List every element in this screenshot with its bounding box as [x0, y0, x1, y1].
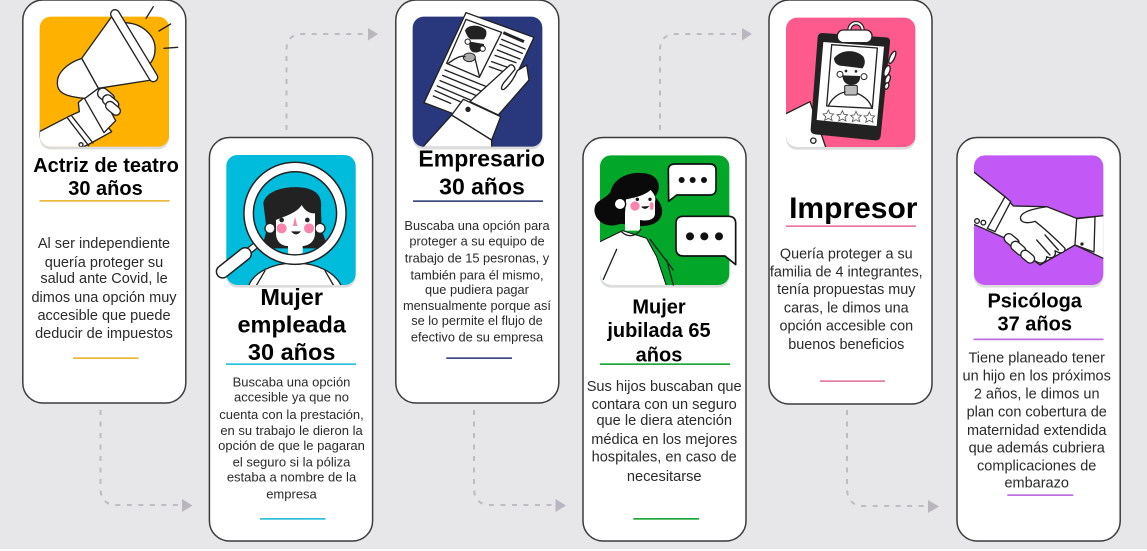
text: impresor description: caras, le dimos una — [784, 301, 909, 317]
heading: impresor: Impresor — [789, 192, 918, 225]
text: empresario description — [403, 218, 551, 345]
text: psicologa description: complicaciones de — [977, 459, 1096, 475]
text: actriz description: accesible que puede — [37, 308, 171, 324]
text: empresario description: proteger a su equipo de — [409, 234, 545, 249]
text: empresario description: se lo permite el flujo de — [411, 313, 543, 328]
text: psicologa description: maternidad extendida — [967, 423, 1107, 439]
panel: mujer empleada — [209, 138, 373, 541]
text: mujer empleada description: cuenta con la prestación, — [219, 407, 364, 422]
text: empresario description: efectivo de su empresa — [411, 330, 544, 345]
icon: clipboard with profile — [783, 18, 915, 150]
arrow: impresor to psicologa — [847, 410, 939, 513]
heading: actriz de teatro: Actriz de teatro — [33, 155, 179, 177]
heading: actriz de teatro: 30 años — [68, 178, 143, 200]
arrow: empresario to mujer jubilada — [474, 410, 566, 512]
heading: empresario: 30 años — [439, 173, 525, 199]
text: impresor description: Quería proteger a su — [780, 246, 913, 262]
heading: mujer empleada: empleada — [237, 312, 347, 338]
heading: empresario — [418, 146, 545, 199]
heading: mujer empleada: Mujer — [260, 284, 323, 310]
icon: magnifier over woman — [223, 155, 356, 288]
text: psicologa description — [963, 351, 1111, 492]
heading: mujer jubilada: años — [636, 345, 682, 367]
text: impresor description: opción accesible con — [779, 319, 913, 335]
text: mujer jubilada description: que le diera atención — [596, 413, 732, 429]
text: mujer jubilada description: Sus hijos buscaban que — [587, 379, 742, 395]
heading: actriz de teatro — [33, 155, 179, 200]
text: mujer empleada description: opción de que le pagaran — [218, 438, 365, 453]
text: mujer jubilada description — [587, 379, 742, 485]
text: mujer empleada description: accesible ya que no — [234, 390, 349, 405]
heading: mujer jubilada — [606, 296, 711, 367]
heading: mujer jubilada: jubilada 65 — [606, 320, 711, 342]
panel: psicologa — [957, 138, 1120, 541]
arrow: mujer empleada to empresario — [286, 28, 378, 130]
text: actriz description: salud ante Covid, le — [40, 271, 168, 287]
text: impresor description: tenía propuestas muy — [777, 282, 916, 298]
text: mujer jubilada description: hospitales, en caso de — [592, 450, 737, 466]
heading: psicologa — [987, 290, 1083, 336]
text: actriz description: dimos una opción muy — [31, 290, 177, 306]
text: mujer jubilada description: contara con un seguro — [592, 397, 737, 413]
text: mujer empleada description: empresa — [266, 486, 318, 501]
text: empresario description: Buscaba una opción para — [404, 218, 550, 233]
icon: woman with speech bubbles — [594, 155, 736, 288]
heading: mujer jubilada: Mujer — [632, 296, 686, 318]
text: impresor description: buenos beneficios — [788, 337, 904, 353]
text: empresario description: que pudiera pagar — [425, 282, 530, 297]
text: empresario description: mensualmente porque así — [403, 298, 551, 313]
panel: actriz de teatro — [23, 0, 186, 403]
heading: psicologa: Psicóloga — [987, 290, 1083, 312]
heading: mujer empleada: 30 años — [248, 339, 335, 365]
text: mujer jubilada description: médica en los mejores — [591, 432, 737, 448]
text: mujer empleada description: en su trabajo le dieron la — [220, 423, 363, 438]
text: actriz description — [31, 236, 177, 342]
heading: empresario: Empresario — [418, 146, 545, 172]
text: impresor description: familia de 4 integrantes, — [770, 265, 923, 281]
icon: megaphone — [39, 7, 178, 149]
text: empresario description: también para él mismo, — [410, 267, 544, 282]
text: actriz description: Al ser independiente — [38, 236, 170, 252]
heading: mujer empleada — [237, 284, 347, 365]
icon: handshake — [970, 155, 1107, 288]
panel: mujer jubilada — [583, 138, 746, 541]
text: psicologa description: que además cubriera — [969, 441, 1106, 457]
text: psicologa description: un hijo en los próximos — [963, 369, 1111, 385]
arrow: actriz to mujer empleada — [100, 410, 192, 512]
text: psicologa description: 2 años, le dimos un — [974, 386, 1100, 402]
text: mujer empleada description: estaba a nombre de la — [227, 470, 357, 485]
text: mujer empleada description: el seguro si la póliza — [233, 455, 351, 470]
text: psicologa description: plan con cobertura de — [967, 405, 1107, 421]
panel: empresario — [396, 0, 559, 403]
text: actriz description: quería proteger su — [45, 255, 163, 271]
text: mujer empleada description — [218, 375, 365, 501]
text: impresor description — [770, 246, 923, 353]
text: empresario description: trabajo de 15 pesronas, y — [405, 250, 550, 265]
text: mujer empleada description: Buscaba una opción — [233, 375, 350, 390]
arrow: mujer jubilada to impresor — [660, 28, 752, 130]
panel: impresor — [769, 0, 932, 404]
icon: hand holding resume — [413, 13, 542, 149]
text: actriz description: deducir de impuestos — [35, 326, 173, 342]
text: psicologa description: embarazo — [1004, 476, 1069, 492]
heading: psicologa: 37 años — [997, 314, 1072, 336]
text: mujer jubilada description: necesitarse — [627, 469, 702, 485]
text: psicologa description: Tiene planeado tener — [968, 351, 1105, 367]
